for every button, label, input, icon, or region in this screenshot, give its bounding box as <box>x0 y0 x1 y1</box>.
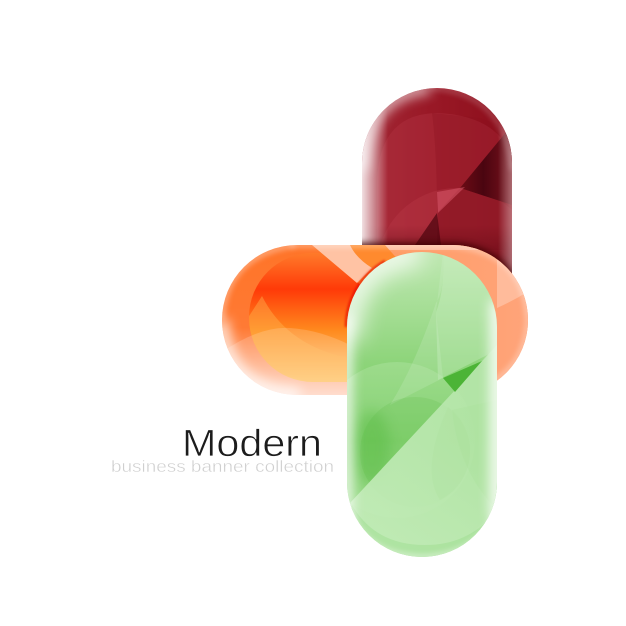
left and bottom fades <box>222 320 300 395</box>
lower circle tint <box>432 407 470 500</box>
shadow of orange capsule on red <box>362 238 512 274</box>
lower dark triangle <box>415 213 441 245</box>
bottom rim <box>350 510 495 557</box>
lower circle <box>364 397 442 482</box>
top light band <box>312 245 372 283</box>
left side fade <box>340 315 352 525</box>
upper circle <box>347 362 454 502</box>
green capsule <box>347 252 497 557</box>
lower circle <box>435 188 458 218</box>
bottom arch <box>352 506 484 557</box>
inner curve <box>249 296 347 382</box>
orange capsule <box>222 245 530 400</box>
core <box>249 260 360 382</box>
orange patch above the core <box>350 245 396 285</box>
inner arch <box>402 113 500 214</box>
side fades <box>362 108 387 245</box>
curve inside the light area <box>452 400 497 510</box>
subtitle: business banner collection <box>111 457 334 476</box>
upper-right light arc <box>385 245 524 308</box>
red capsule <box>362 88 512 274</box>
dark wedge <box>460 125 512 205</box>
facet right of the curve <box>502 126 512 157</box>
right panel <box>436 252 497 380</box>
diagonal light area <box>347 345 500 560</box>
upper-left highlight <box>347 252 420 340</box>
right side fade <box>490 300 504 520</box>
dark wedge <box>443 361 482 392</box>
fade to dark above orange <box>372 231 512 273</box>
wave <box>228 328 347 395</box>
upper-left rim <box>362 88 430 170</box>
heading: Modern: Modern <box>182 423 322 465</box>
shadow of green capsule on orange <box>346 261 385 327</box>
light facet <box>437 187 465 213</box>
curved band <box>390 268 443 404</box>
outer ring shade <box>362 88 506 156</box>
wedge shade under <box>437 188 512 250</box>
infographic: capsule cross banner <box>112 88 528 557</box>
dark left <box>354 410 390 486</box>
